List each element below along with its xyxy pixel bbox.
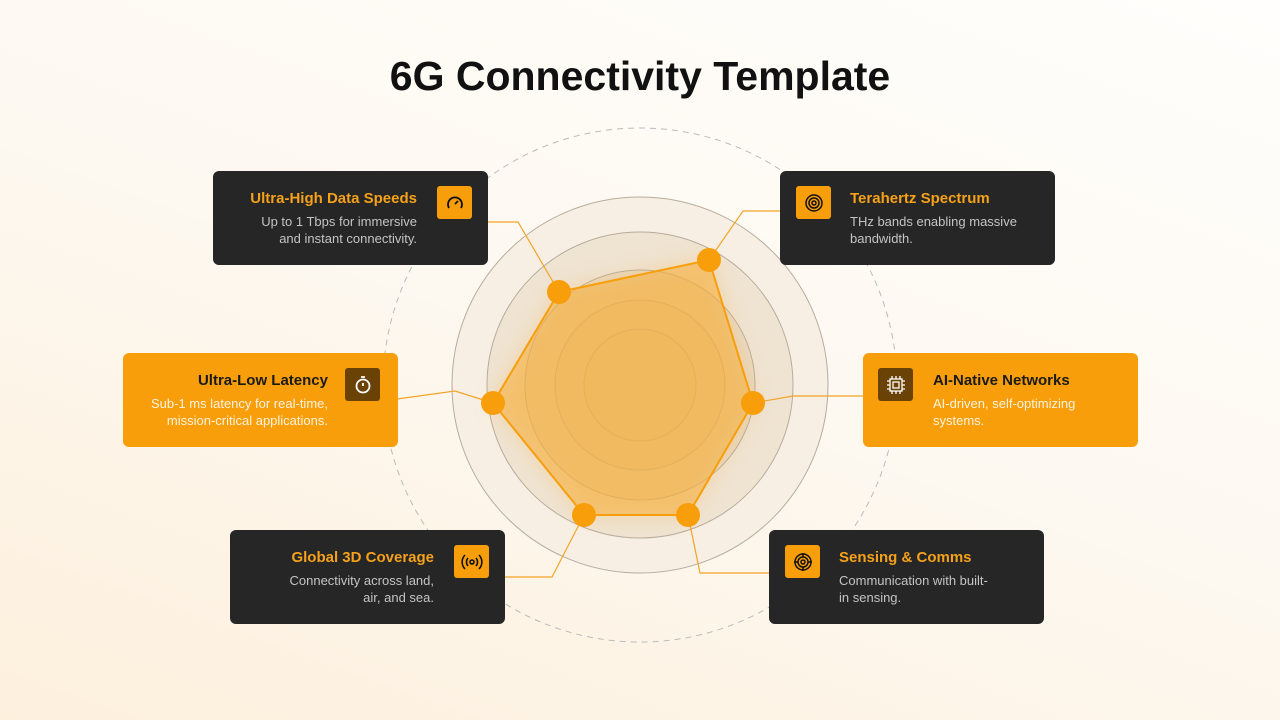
panel: terahertz spectrum: bandwidth.	[850, 231, 913, 246]
panel: global 3d coverage: Global 3D Coverage	[291, 549, 434, 566]
panel: sensing & comms	[769, 530, 1044, 624]
panel: ultra-high data speeds: and instant connectivity.	[279, 231, 417, 246]
panel: sensing & comms: Sensing & Comms	[839, 549, 972, 566]
icon: radar	[785, 545, 820, 578]
panel: ultra-high data speeds	[213, 171, 488, 265]
panel: ai-native networks: AI-Native Networks	[933, 372, 1070, 389]
panel: global 3d coverage: air, and sea.	[363, 590, 434, 605]
panel: terahertz spectrum: Terahertz Spectrum	[850, 190, 990, 207]
panel: ultra-low latency: mission-critical applications.	[167, 413, 328, 428]
panel: global 3d coverage	[230, 530, 505, 624]
panel: ai-native networks: systems.	[933, 413, 984, 428]
icon: chip	[878, 368, 913, 401]
panel: sensing & comms: in sensing.	[839, 590, 901, 605]
panel: terahertz spectrum	[780, 171, 1055, 265]
panel: ultra-low latency	[123, 353, 398, 447]
connectors	[397, 211, 863, 577]
icon: stopwatch	[345, 368, 380, 401]
panel: ai-native networks: AI-driven, self-optimizing	[933, 396, 1075, 411]
panel: ultra-high data speeds: Ultra-High Data Speeds	[250, 190, 417, 207]
panel: terahertz spectrum: THz bands enabling massive	[850, 214, 1017, 229]
title: 6G Connectivity Template	[390, 53, 890, 99]
panel: global 3d coverage: Connectivity across land,	[289, 573, 434, 588]
icon: speedometer	[437, 186, 472, 219]
radar polygon	[493, 260, 753, 515]
panel: ultra-low latency: Sub-1 ms latency for real-time,	[151, 396, 328, 411]
panel: ultra-high data speeds: Up to 1 Tbps for immersive	[261, 214, 417, 229]
icon: target	[796, 186, 831, 219]
icon: broadcast	[454, 545, 489, 578]
panel: sensing & comms: Communication with built-	[839, 573, 988, 588]
panel: ai-native networks	[863, 353, 1138, 447]
panel: ultra-low latency: Ultra-Low Latency	[198, 372, 328, 389]
